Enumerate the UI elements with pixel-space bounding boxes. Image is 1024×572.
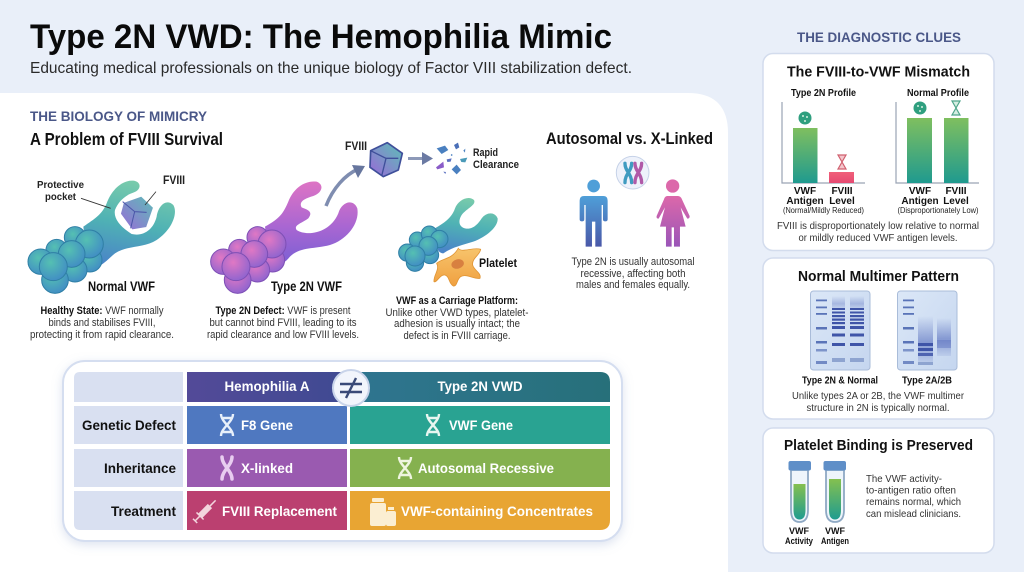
icon: male figure (580, 180, 608, 247)
icon: FVIII fragments (436, 143, 467, 174)
chart: type 2N profile: Level (829, 196, 855, 207)
card: normal multimer pattern (763, 258, 994, 419)
row: inheritance: Autosomal Recessive (418, 461, 554, 476)
text: type 2N defect: Type 2N Defect: VWF is present (216, 305, 350, 317)
row: inheritance: Inheritance (104, 461, 176, 476)
card text: remains normal, which (866, 496, 961, 508)
heading: autosomal vs X-linked: Autosomal vs. X-Linked (546, 130, 713, 148)
label: type 2N VWF: Type 2N VWF (271, 279, 342, 294)
row: treatment (74, 491, 610, 530)
chart: type 2N profile: FVIII (831, 186, 853, 197)
tube labels (785, 526, 849, 546)
row: treatment: Treatment (111, 504, 176, 519)
text: healthy state: binds and stabilises FVIII, (48, 317, 156, 329)
text: type 2N defect (207, 305, 359, 341)
card text: FVIII is disproportionately low relative to normal (777, 220, 979, 232)
heading: a problem of FVIII survival: A Problem of FVIII Survival (30, 129, 223, 149)
card heading: The FVIII-to-VWF Mismatch (787, 64, 970, 80)
row: genetic defect: VWF Gene (449, 418, 513, 433)
icon: female figure (657, 179, 690, 247)
text: inheritance note: males and females equally. (576, 279, 690, 291)
text: type 2N defect: but cannot bind FVIII, leading to its (210, 317, 357, 329)
label: protective: Protective (37, 179, 84, 191)
illustration: VWF on platelet (399, 198, 517, 286)
text: VWF as a carriage platform (386, 295, 529, 342)
text: VWF as a carriage platform: Unlike other VWD types, platelet- (386, 307, 529, 319)
row: genetic defect (74, 406, 610, 444)
row: genetic defect: Genetic Defect (82, 418, 176, 433)
chart: type 2N profile: Antigen (786, 196, 824, 207)
card: platelet binding is preserved (763, 428, 994, 553)
label: FVIII: FVIII (163, 175, 185, 187)
text: inheritance note: recessive, affecting both (580, 268, 686, 280)
label: FVIII free: FVIII (345, 141, 367, 153)
section label: the diagnostic clues: THE DIAGNOSTIC CLUES (797, 29, 961, 45)
subtitle: Educating medical professionals on the unique biology of Factor VIII stabilization defect. (30, 60, 632, 77)
row: treatment: VWF-containing Concentrates (401, 504, 593, 519)
chart: normal profile: VWF (909, 186, 931, 197)
main biology panel (0, 93, 728, 572)
card text (866, 473, 961, 520)
label: rapid clearance: Rapid (473, 147, 498, 159)
icon: chromosome badge (616, 156, 649, 189)
header row: Hemophilia A (224, 379, 310, 394)
text: VWF as a carriage platform: adhesion is usually intact; the (394, 318, 520, 330)
text: VWF as a carriage platform: VWF as a Carriage Platform: (396, 295, 518, 307)
text: inheritance note (572, 256, 694, 291)
text: type 2N defect: rapid clearance and low FVIII levels. (207, 329, 359, 341)
label: platelet: Platelet (479, 256, 517, 270)
chart: normal profile: FVIII (945, 186, 967, 197)
row: inheritance: X-linked (241, 461, 293, 476)
chart: normal profile: Normal Profile (907, 88, 969, 99)
label: rapid clearance: Clearance (473, 159, 519, 171)
card heading: Normal Multimer Pattern (798, 269, 959, 285)
icon: test tube VWF antigen (824, 461, 846, 522)
chart: normal profile: Level (943, 196, 969, 207)
illustration: normal VWF (28, 175, 185, 294)
gel labels (802, 374, 952, 386)
text: VWF as a carriage platform: defect is in FVIII carriage. (404, 330, 510, 342)
text: inheritance note: Type 2N is usually autosomal (572, 256, 694, 268)
card text: The VWF activity- (866, 473, 942, 485)
gel: type 2A/2B (898, 291, 957, 370)
arrow: FVIII leaving VWF (326, 165, 365, 206)
chart: normal profile: Antigen (901, 196, 939, 207)
tube labels: VWF (789, 526, 809, 536)
tube labels: Activity (785, 536, 813, 546)
card heading: Platelet Binding is Preserved (784, 438, 973, 454)
header row (74, 372, 610, 402)
card text: can mislead clinicians. (866, 508, 961, 520)
arrow: toward clearance (408, 152, 433, 165)
title: Type 2N VWD: The Hemophilia Mimic (30, 18, 612, 56)
illustration: type 2N VWF (211, 181, 358, 294)
label: normal VWF: Normal VWF (88, 279, 155, 294)
card text (792, 390, 964, 414)
gel labels: Type 2A/2B (902, 374, 952, 386)
chart: normal profile (896, 88, 979, 215)
icon: free FVIII hexagon (370, 143, 402, 177)
card text: structure in 2N is typically normal. (806, 402, 950, 414)
card text: to-antigen ratio often (866, 484, 956, 496)
card text: or mildly reduced VWF antigen levels. (798, 232, 958, 244)
label: pocket: pocket (45, 191, 76, 203)
card text: Unlike types 2A or 2B, the VWF multimer (792, 390, 964, 402)
text: healthy state (30, 305, 174, 341)
text: healthy state: Healthy State: VWF normally (40, 305, 164, 317)
tube labels: VWF (825, 526, 845, 536)
tube labels: Antigen (821, 536, 849, 546)
gel: type 2N and normal (810, 291, 870, 370)
label: rapid clearance (473, 147, 519, 171)
icon: not-equal badge (333, 370, 369, 406)
card text (777, 220, 979, 244)
chart: type 2N profile: (Normal/Mildly Reduced) (783, 206, 864, 215)
chart: type 2N profile: Type 2N Profile (791, 88, 856, 99)
chart: type 2N profile (782, 88, 865, 215)
icon: test tube VWF activity (788, 461, 811, 522)
header row: Type 2N VWD (438, 379, 523, 394)
chart: normal profile: (Disproportionately Low) (898, 206, 979, 215)
comparison table (63, 361, 622, 541)
row: inheritance (74, 449, 610, 487)
gel labels: Type 2N & Normal (802, 374, 878, 386)
row: treatment: FVIII Replacement (222, 504, 337, 519)
row: genetic defect: F8 Gene (241, 418, 293, 433)
card: FVIII-to-VWF mismatch (763, 54, 994, 250)
icon: platelet (434, 248, 481, 286)
section label: the biology of mimicry: THE BIOLOGY OF MIMICRY (30, 108, 208, 124)
chart: type 2N profile: VWF (794, 186, 816, 197)
text: healthy state: protecting it from rapid clearance. (30, 329, 174, 341)
